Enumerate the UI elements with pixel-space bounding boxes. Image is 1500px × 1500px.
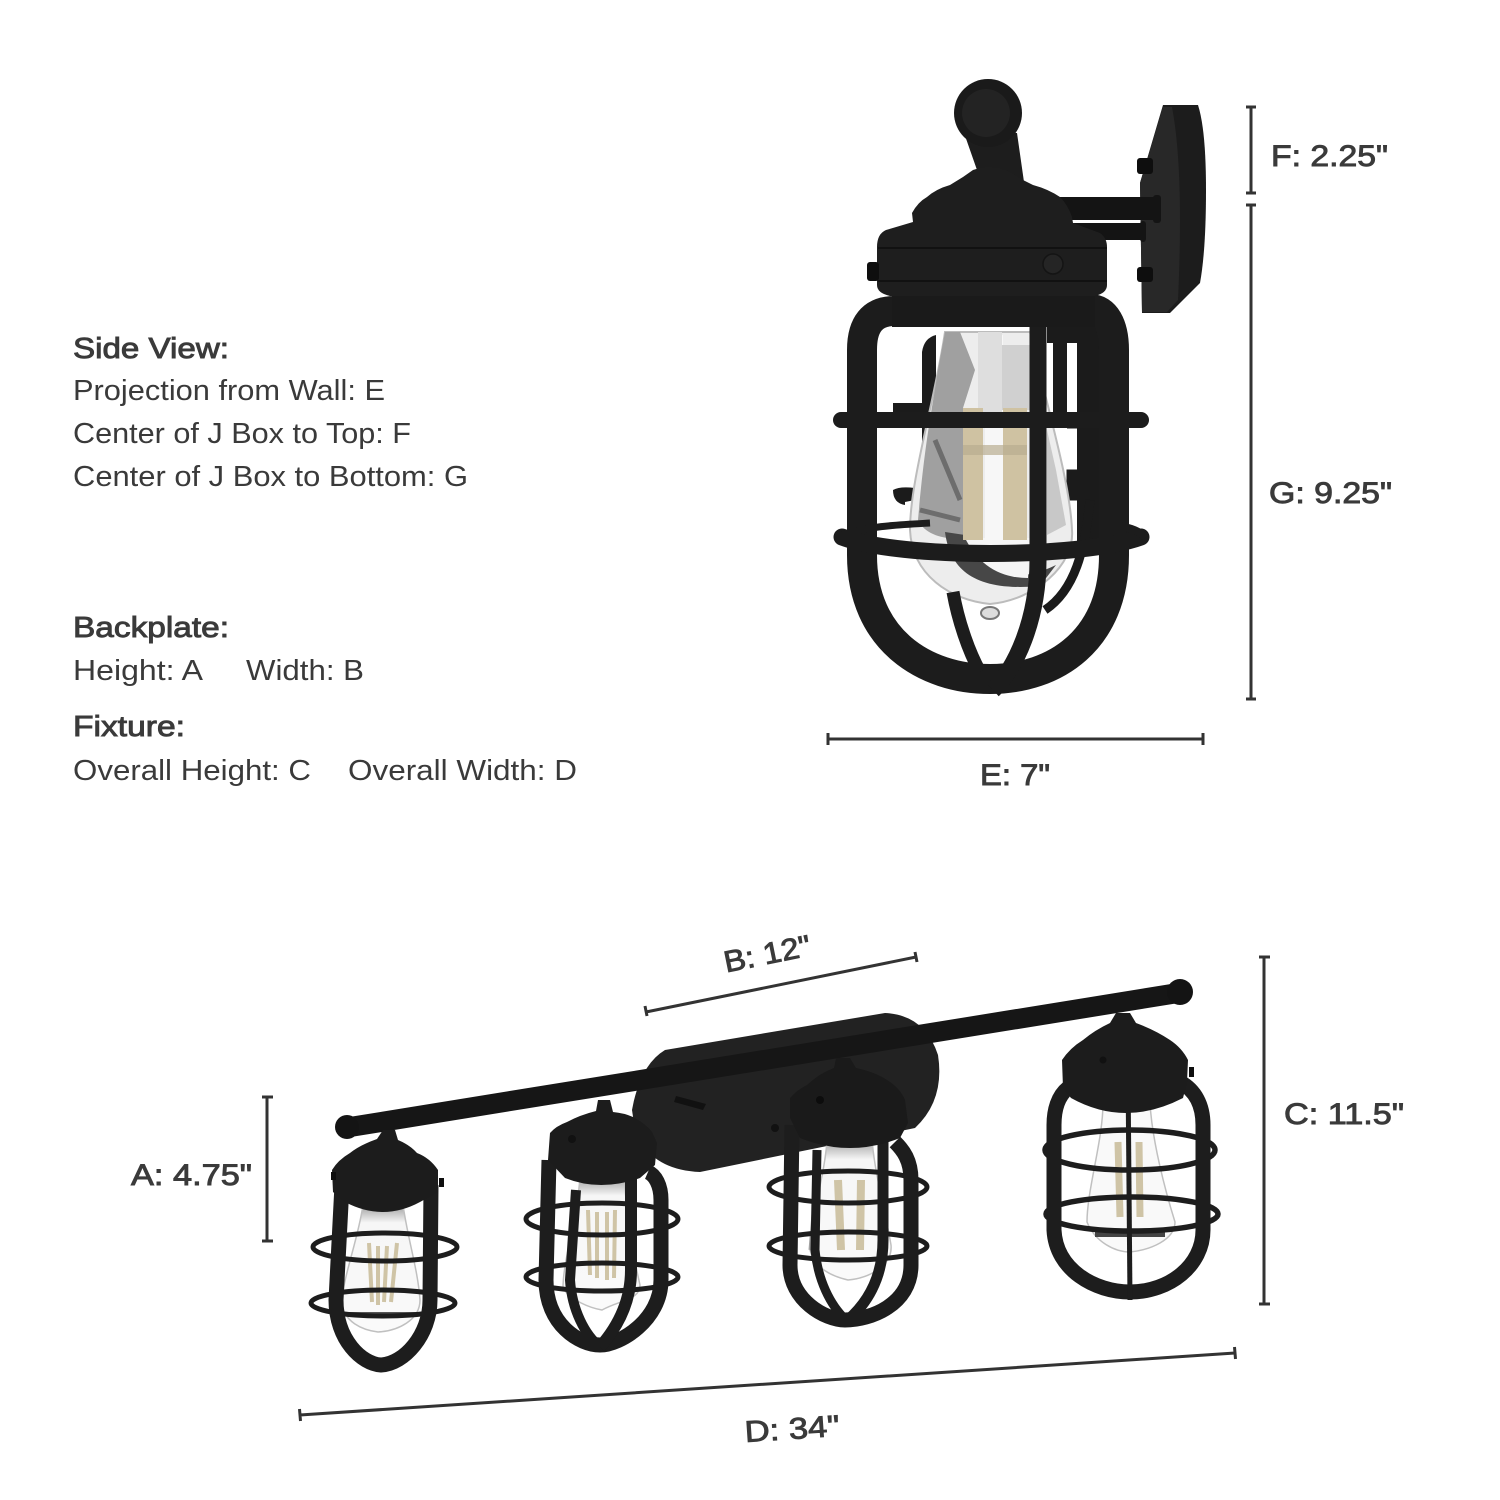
text block: side view legend: Side View:: [73, 333, 229, 365]
text block: fixture legend: Overall Width: D: [348, 755, 577, 787]
dimension label A: A: 4.75": [131, 1159, 252, 1192]
dimension label F: F: 2.25": [1271, 140, 1388, 173]
text block: side view legend: Center of J Box to Top: F: [73, 418, 411, 450]
bulb 3: [810, 1140, 891, 1280]
rings 2: [526, 1203, 678, 1291]
side view lantern fixture: [833, 79, 1206, 690]
front view vanity fixture: [311, 979, 1218, 1365]
bulb 1: [342, 1205, 420, 1332]
wall backplate: [1137, 105, 1206, 313]
rings 1: [311, 1233, 457, 1316]
cage 3: [790, 1125, 911, 1320]
text block: backplate legend: Width: B: [246, 655, 364, 687]
lamp 4: [1045, 1013, 1218, 1300]
cage 1: [336, 1185, 431, 1365]
rings 4: [1045, 1130, 1218, 1231]
text block: fixture legend: Overall Height: C: [73, 755, 311, 787]
text block: backplate legend: [73, 612, 364, 687]
mounting arms: [1055, 195, 1161, 242]
cage 2: [546, 1160, 661, 1347]
text block: side view legend: Center of J Box to Bottom: G: [73, 461, 468, 493]
front view dimension lines: [262, 952, 1270, 1421]
rings 3: [769, 1171, 927, 1260]
lamp 1: [311, 1130, 457, 1365]
text block: side view legend: [73, 333, 468, 493]
dimension label C: C: 11.5": [1284, 1098, 1404, 1131]
cage frame: [862, 309, 1114, 690]
text block: fixture legend: [73, 711, 577, 787]
text block: backplate legend: Backplate:: [73, 612, 229, 644]
housing 2: [548, 1100, 657, 1185]
cage 4: [1054, 1072, 1203, 1300]
lamp 2: [526, 1100, 678, 1347]
oval backplate: [632, 1013, 939, 1172]
swivel knob and neck: [954, 79, 1024, 182]
dimension label G: G: 9.25": [1269, 477, 1392, 510]
bulb 2: [563, 1177, 640, 1310]
lantern housing: [867, 167, 1107, 327]
bulb 4: [1087, 1103, 1175, 1252]
side view dimension lines: [828, 107, 1256, 745]
dimension label E: E: 7": [980, 759, 1050, 792]
text block: backplate legend: Height: A: [73, 655, 204, 687]
dimension label D: D: 34": [744, 1410, 841, 1449]
housing 1: [331, 1130, 444, 1212]
dimension label B: B: 12": [721, 930, 814, 979]
lamp 3: [769, 1058, 927, 1320]
housing 4: [1062, 1013, 1194, 1113]
back cage bars: [893, 327, 1103, 610]
glass bulb: [910, 332, 1072, 619]
cage ring upper: [833, 412, 1149, 428]
text block: fixture legend: Fixture:: [73, 711, 185, 743]
housing 3: [790, 1058, 908, 1148]
cage ring lower: [842, 523, 1145, 554]
text block: side view legend: Projection from Wall: E: [73, 375, 385, 407]
horizontal rod: [335, 979, 1193, 1139]
